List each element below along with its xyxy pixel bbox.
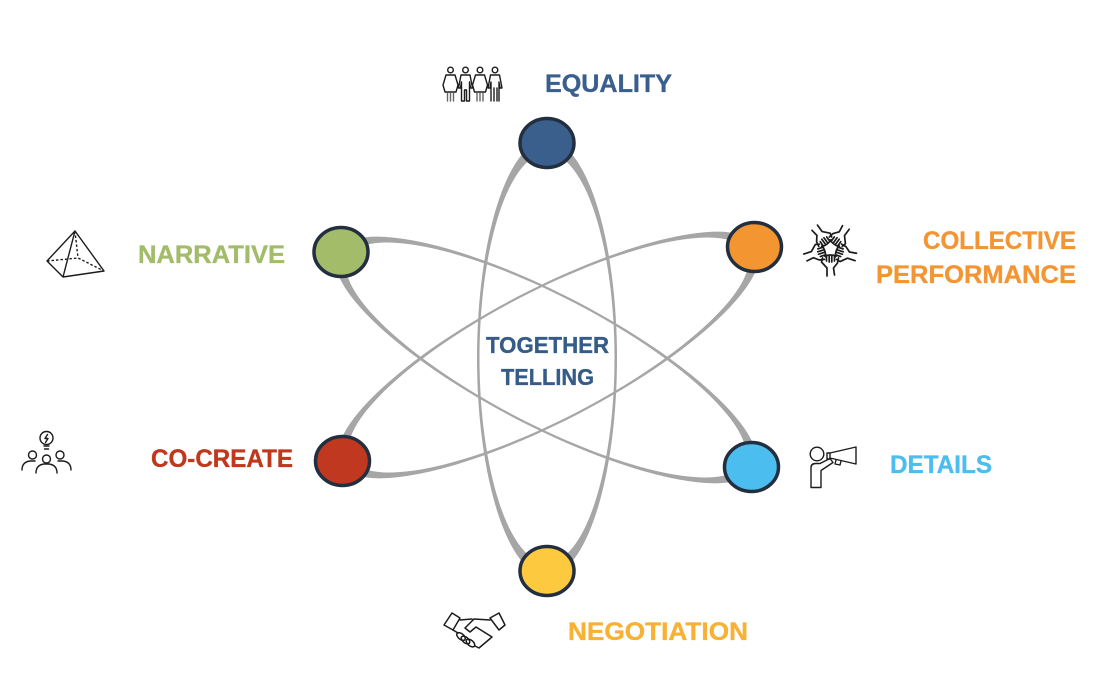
orbit: vertical — [477, 140, 617, 576]
atom orbits — [307, 140, 787, 576]
node: collective performance — [728, 222, 782, 272]
label: collective performance — [876, 227, 1076, 289]
label: details: DETAILS — [890, 451, 992, 479]
icon: four people — [443, 67, 502, 101]
node: narrative — [314, 228, 368, 276]
center title: TELLING — [501, 364, 594, 390]
label: collective performance: PERFORMANCE — [876, 261, 1076, 289]
icon: joined hands — [802, 222, 859, 276]
icon: person with megaphone — [810, 447, 856, 488]
label: equality: EQUALITY — [545, 70, 672, 98]
label: collective performance: COLLECTIVE — [923, 227, 1076, 255]
center title: TOGETHER — [486, 332, 609, 358]
node: negotiation — [520, 546, 574, 596]
icon: pyramid — [47, 231, 104, 277]
center title — [486, 332, 609, 390]
label: negotiation: NEGOTIATION — [568, 618, 748, 646]
node: details — [724, 442, 778, 492]
label: co-create: CO-CREATE — [151, 445, 293, 473]
orbit: narrative to details — [307, 193, 785, 527]
orbit: collective performance to co-create — [310, 188, 787, 522]
node: co-create — [316, 436, 370, 486]
icon: group with light bulb — [22, 432, 71, 473]
icon: handshake — [444, 613, 505, 648]
node: equality — [520, 118, 574, 168]
label: narrative: NARRATIVE — [138, 241, 285, 269]
